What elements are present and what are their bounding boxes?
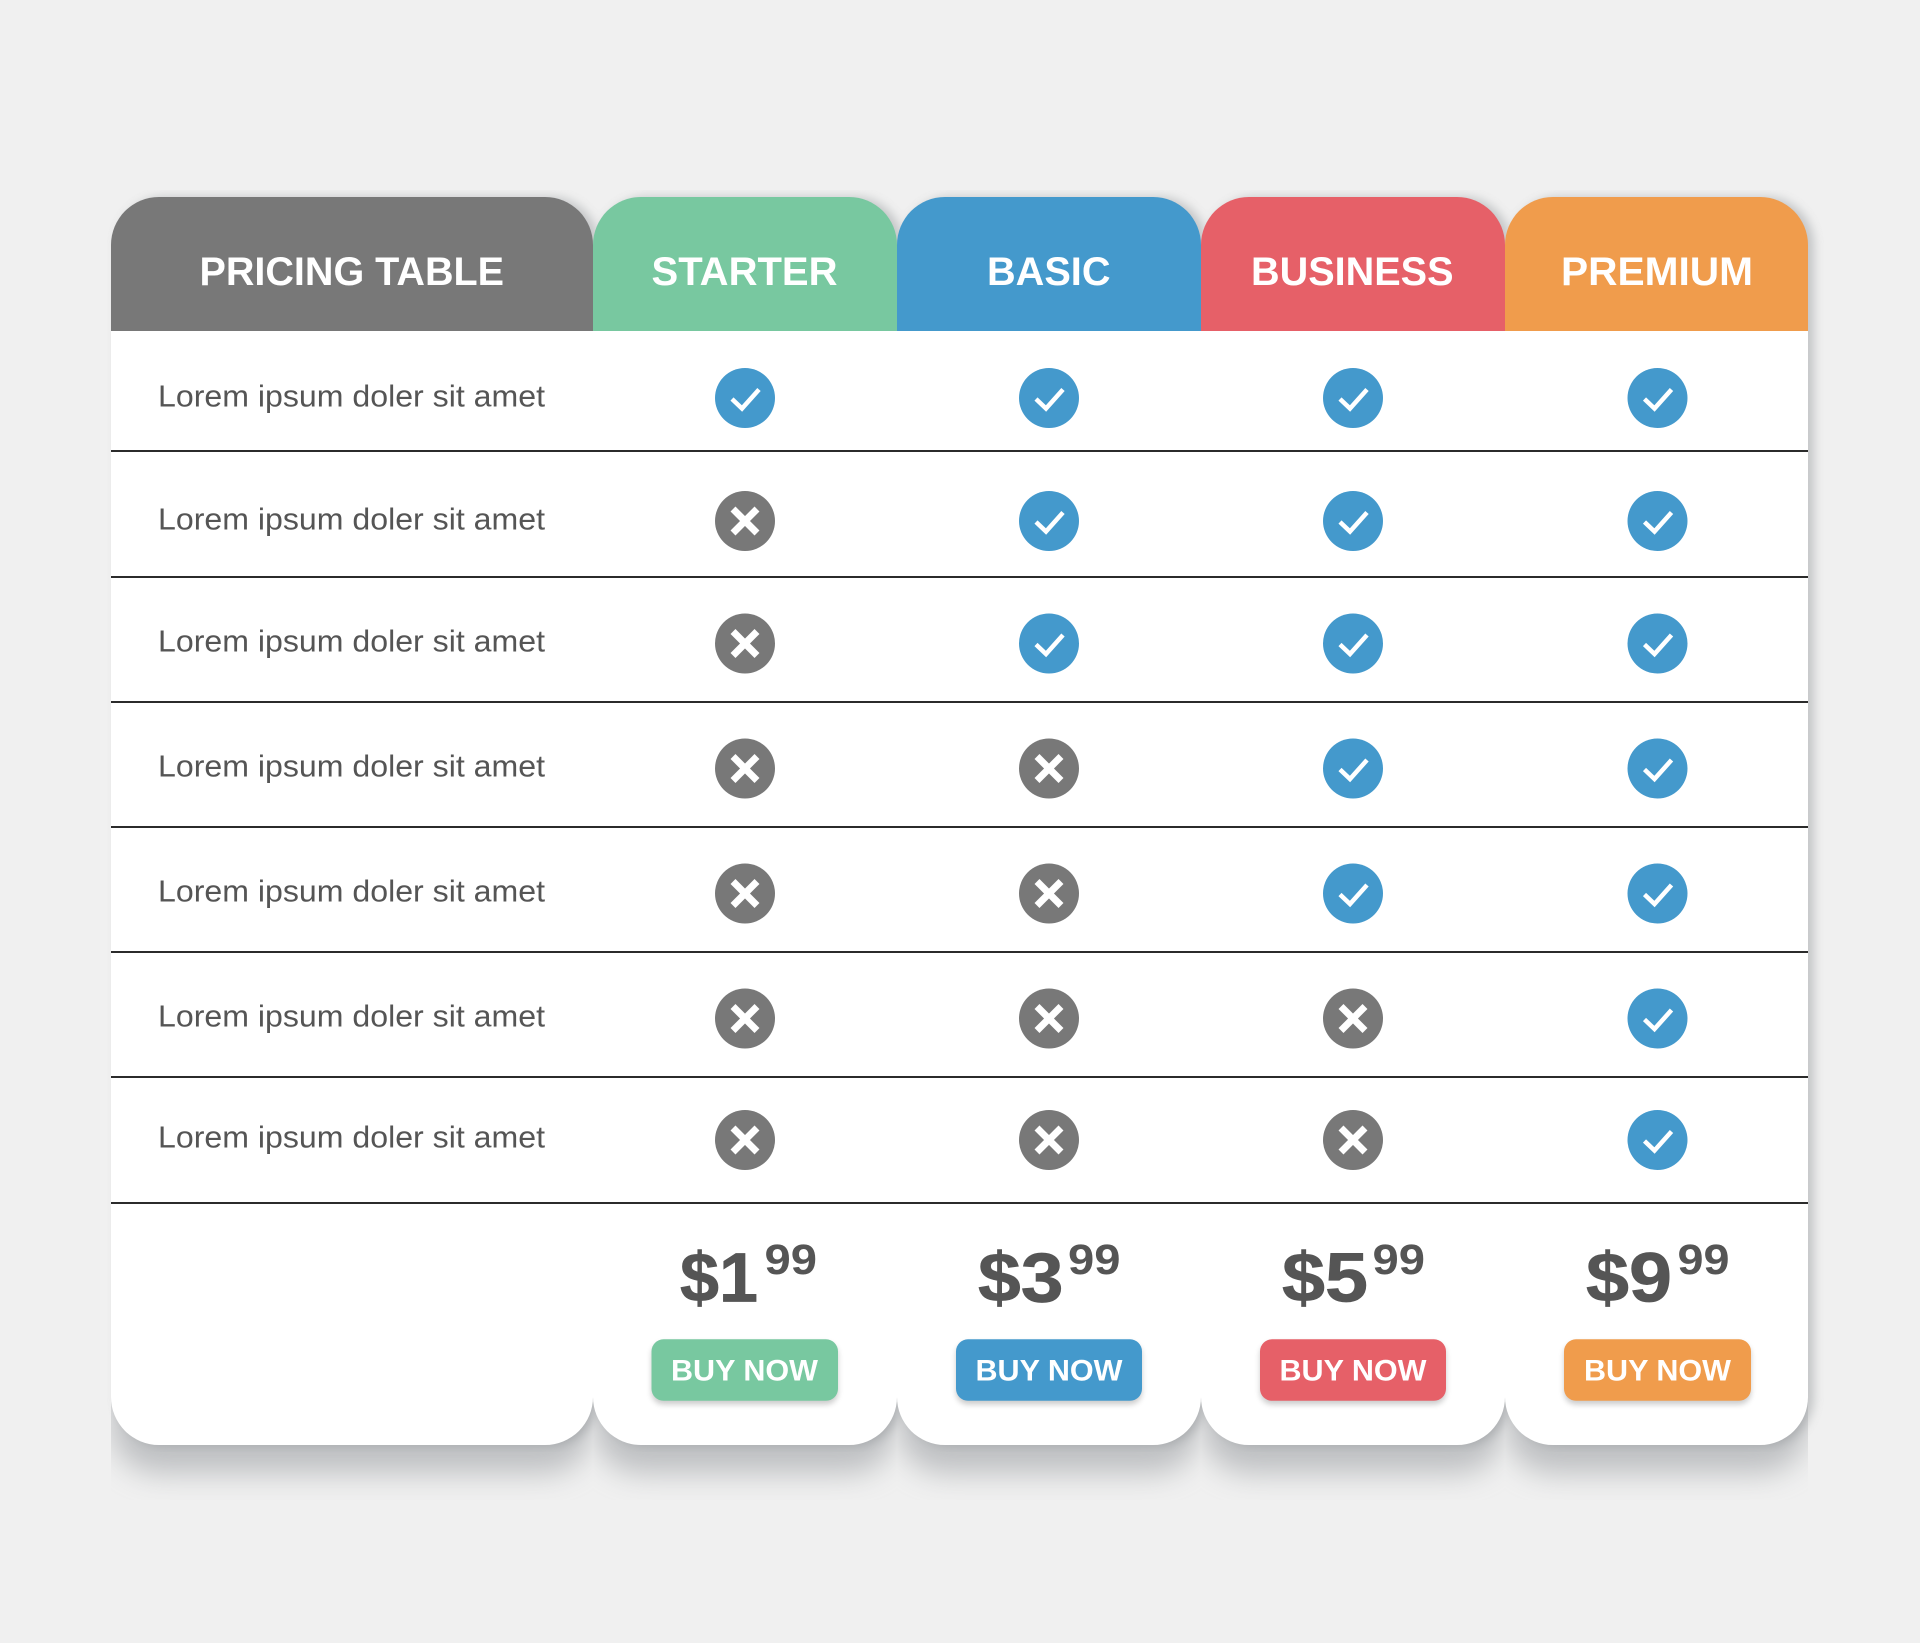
header: premium — [1505, 197, 1808, 331]
row label: Lorem ipsum doler sit amet — [158, 1120, 545, 1154]
row label: Lorem ipsum doler sit amet — [158, 873, 545, 908]
icon: check basic — [1019, 614, 1079, 674]
icon: check premium — [1628, 491, 1688, 551]
button: basic — [956, 1339, 1142, 1404]
icon: cross starter — [715, 738, 775, 798]
button: starter — [652, 1339, 838, 1404]
price: starter — [680, 1236, 817, 1317]
price: premium: $9 — [1586, 1239, 1672, 1317]
row 6 — [158, 988, 1688, 1048]
header: basic — [897, 197, 1201, 331]
row label: Lorem ipsum doler sit amet — [158, 998, 545, 1033]
icon: cross basic — [1019, 738, 1079, 798]
icon: check premium — [1628, 988, 1688, 1048]
button: business: BUY NOW — [1280, 1355, 1427, 1388]
icon: cross basic — [1019, 988, 1079, 1048]
row label: Lorem ipsum doler sit amet — [158, 501, 545, 536]
price: premium: 99 — [1678, 1236, 1730, 1284]
icon: cross business — [1323, 988, 1383, 1048]
button: basic: BUY NOW — [976, 1355, 1123, 1388]
button: premium: BUY NOW — [1584, 1355, 1732, 1388]
icon: cross starter — [715, 1110, 775, 1170]
header: starter: STARTER — [652, 250, 838, 294]
price: business: 99 — [1372, 1236, 1425, 1284]
icon: check business — [1323, 614, 1383, 674]
row 2 — [158, 491, 1688, 551]
row 4 — [158, 738, 1688, 798]
panel: table body — [111, 300, 1808, 1445]
header: business — [1201, 197, 1505, 331]
row 1 — [158, 368, 1688, 428]
price: starter: 99 — [764, 1236, 817, 1284]
icon: check basic — [1019, 491, 1079, 551]
icon: check starter — [715, 368, 775, 428]
icon: check premium — [1628, 864, 1688, 924]
header: pricing table: PRICING TABLE — [200, 250, 504, 294]
header: premium: PREMIUM — [1561, 250, 1753, 294]
icon: cross starter — [715, 864, 775, 924]
price: business — [1282, 1236, 1425, 1317]
icon: cross basic — [1019, 864, 1079, 924]
row 3 — [158, 614, 1688, 674]
icon: check business — [1323, 864, 1383, 924]
icon: check business — [1323, 491, 1383, 551]
icon: check basic — [1019, 368, 1079, 428]
icon: check business — [1323, 738, 1383, 798]
icon: cross starter — [715, 988, 775, 1048]
row label: Lorem ipsum doler sit amet — [158, 748, 545, 784]
header: business: BUSINESS — [1251, 250, 1454, 294]
row 7 — [158, 1110, 1688, 1170]
icon: check premium — [1628, 1110, 1688, 1170]
row label: Lorem ipsum doler sit amet — [158, 624, 545, 659]
icon: check premium — [1628, 614, 1688, 674]
row label: Lorem ipsum doler sit amet — [158, 379, 545, 414]
button: premium — [1564, 1339, 1751, 1404]
price: starter: $1 — [680, 1239, 758, 1317]
price: basic: 99 — [1068, 1236, 1120, 1284]
icon: check premium — [1628, 368, 1688, 428]
price: basic — [978, 1236, 1120, 1317]
icon: check business — [1323, 368, 1383, 428]
price: premium — [1586, 1236, 1730, 1317]
header: pricing table — [111, 197, 593, 331]
icon: cross starter — [715, 614, 775, 674]
row 5 — [158, 864, 1688, 924]
header: basic: BASIC — [987, 250, 1110, 294]
button: starter: BUY NOW — [671, 1355, 819, 1388]
column shadows — [111, 197, 1814, 1473]
icon: cross business — [1323, 1110, 1383, 1170]
button: business — [1260, 1339, 1446, 1404]
price: basic: $3 — [978, 1239, 1064, 1317]
header: starter — [593, 197, 897, 331]
icon: check premium — [1628, 738, 1688, 798]
price: business: $5 — [1282, 1239, 1368, 1317]
icon: cross starter — [715, 491, 775, 551]
icon: cross basic — [1019, 1110, 1079, 1170]
